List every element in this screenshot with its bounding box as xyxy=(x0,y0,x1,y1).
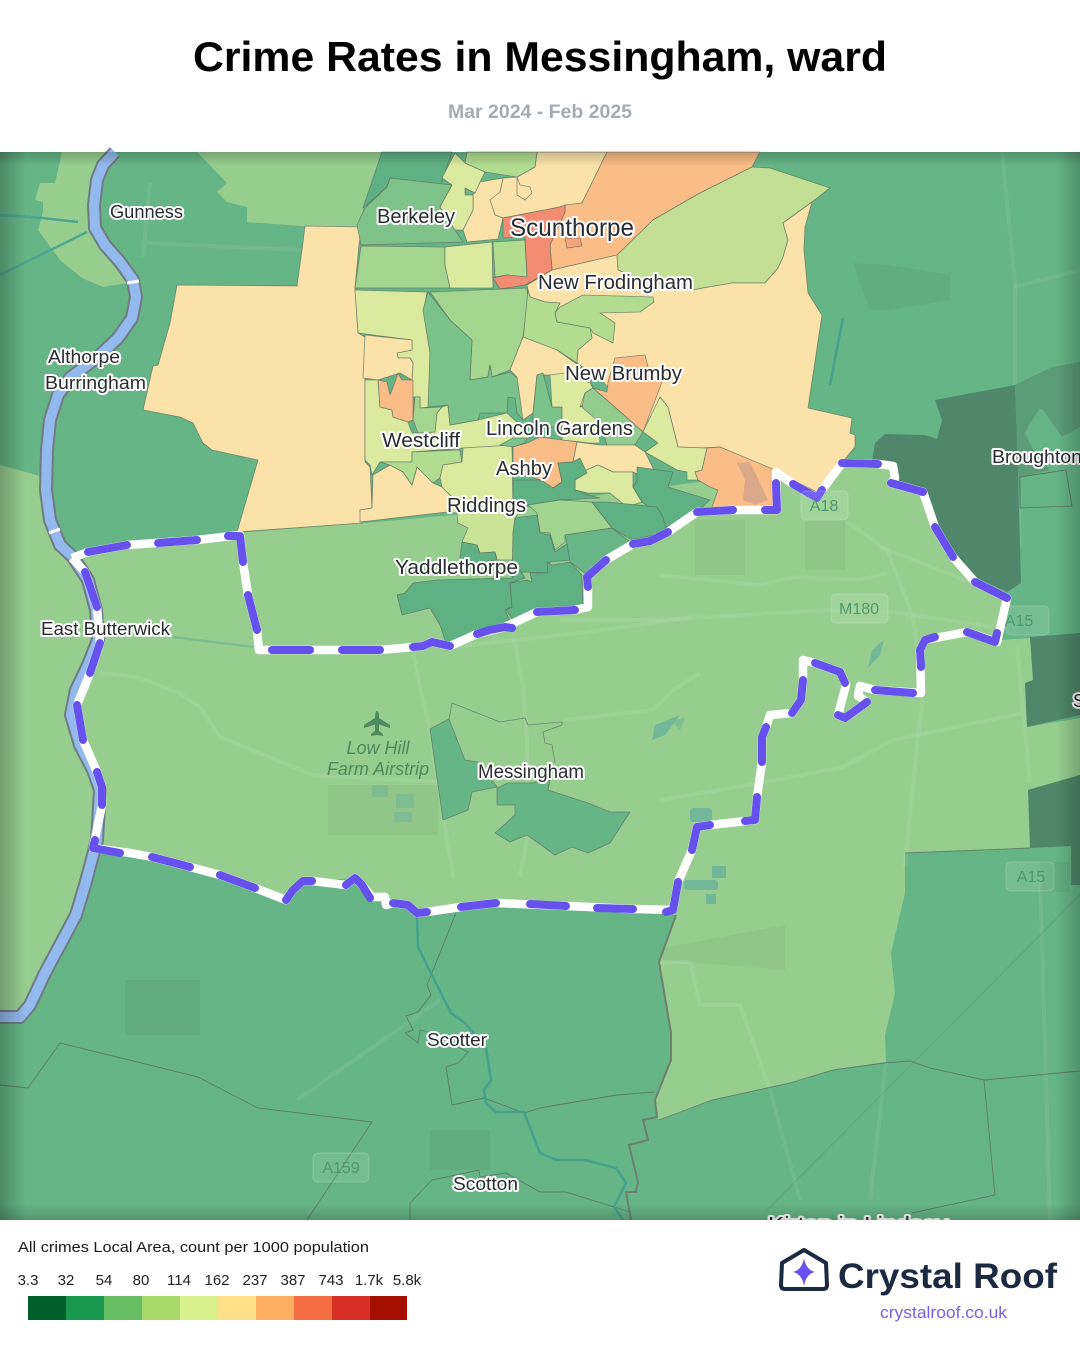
place name labels: Scunthorpe xyxy=(510,214,634,242)
place name labels: New Frodingham xyxy=(538,272,693,294)
Crystal Roof logo xyxy=(781,1250,1057,1322)
place name labels: Althorpe xyxy=(48,347,120,367)
map edge vignette xyxy=(0,152,1080,1220)
map: darker wards to the east xyxy=(845,362,1080,885)
legend values: 5.8k xyxy=(393,1272,422,1289)
place name labels: Ashby xyxy=(496,458,552,480)
legend values: 162 xyxy=(204,1272,230,1289)
logo wordmark: Crystal Roof xyxy=(838,1257,1057,1296)
Messingham ward boundary, purple dashes xyxy=(77,463,1007,913)
subtitle: date range: Mar 2024 - Feb 2025 xyxy=(448,102,632,123)
place name labels: Westcliff xyxy=(382,430,460,452)
place name labels: Broughton xyxy=(992,447,1080,467)
icon: house with sparkle xyxy=(781,1250,827,1289)
map: Messingham village wards xyxy=(430,703,630,855)
place name labels: Messingham xyxy=(478,762,584,783)
place name labels: Yaddlethorpe xyxy=(395,557,518,579)
footer panel xyxy=(0,1220,1080,1350)
legend values: 237 xyxy=(242,1272,268,1289)
legend xyxy=(18,1239,422,1320)
place name labels: Berkeley xyxy=(377,206,455,228)
map: field shading xyxy=(125,263,1070,1170)
map: wards south of Scunthorpe xyxy=(397,500,667,647)
place name labels: Lincoln Gardens xyxy=(486,418,633,440)
map: built-up shading in south-east Scunthorpe xyxy=(737,462,768,505)
road signs: M180 xyxy=(839,601,879,618)
road signs xyxy=(313,491,1054,1182)
place name labels: Kirton in Lindsey xyxy=(768,1214,948,1236)
place name labels: East Butterwick xyxy=(41,619,171,639)
legend values: 1.7k xyxy=(355,1272,384,1289)
place name labels: New Brumby xyxy=(565,363,682,385)
road signs: A15 xyxy=(1005,613,1033,630)
road signs: A18 xyxy=(810,498,838,515)
legend values: 32 xyxy=(58,1272,74,1289)
place name labels: Gunness xyxy=(110,202,183,222)
Messingham ward boundary, white line xyxy=(72,463,1007,913)
legend values: 114 xyxy=(167,1272,191,1289)
map: streams xyxy=(0,215,843,1220)
legend values: 387 xyxy=(280,1272,306,1289)
airstrip label: Farm Airstrip xyxy=(327,759,429,779)
legend values: 3.3 xyxy=(18,1272,38,1289)
legend values xyxy=(18,1272,422,1289)
road signs: A15 xyxy=(1017,869,1045,886)
place name labels: Scotter xyxy=(427,1030,487,1050)
place name labels xyxy=(41,202,1080,1236)
legend values: 54 xyxy=(96,1272,112,1289)
title: Crime Rates in Messingham, ward xyxy=(193,33,887,80)
legend values: 80 xyxy=(133,1272,149,1289)
legend colour scale xyxy=(28,1296,407,1320)
airstrip label: Low Hill xyxy=(346,738,411,758)
road signs: A159 xyxy=(322,1160,360,1177)
logo url: crystalroof.co.uk xyxy=(880,1304,1008,1322)
place name labels: Riddings xyxy=(447,495,526,517)
place name labels: Burringham xyxy=(45,373,146,393)
icon: airstrip plane xyxy=(364,711,390,736)
place name labels: Scotton xyxy=(453,1174,518,1194)
map: Scunthorpe wards xyxy=(143,152,855,532)
legend values: 743 xyxy=(318,1272,344,1289)
legend title: All crimes Local Area, count per 1000 population xyxy=(18,1239,369,1256)
map: light green areas including Messingham ward xyxy=(0,152,1080,1120)
map: River Trent xyxy=(0,152,139,1017)
map: teal building and pond details xyxy=(372,640,884,904)
map: boundary lines in the south xyxy=(0,848,1080,1220)
map: faint roads xyxy=(100,152,1080,1220)
